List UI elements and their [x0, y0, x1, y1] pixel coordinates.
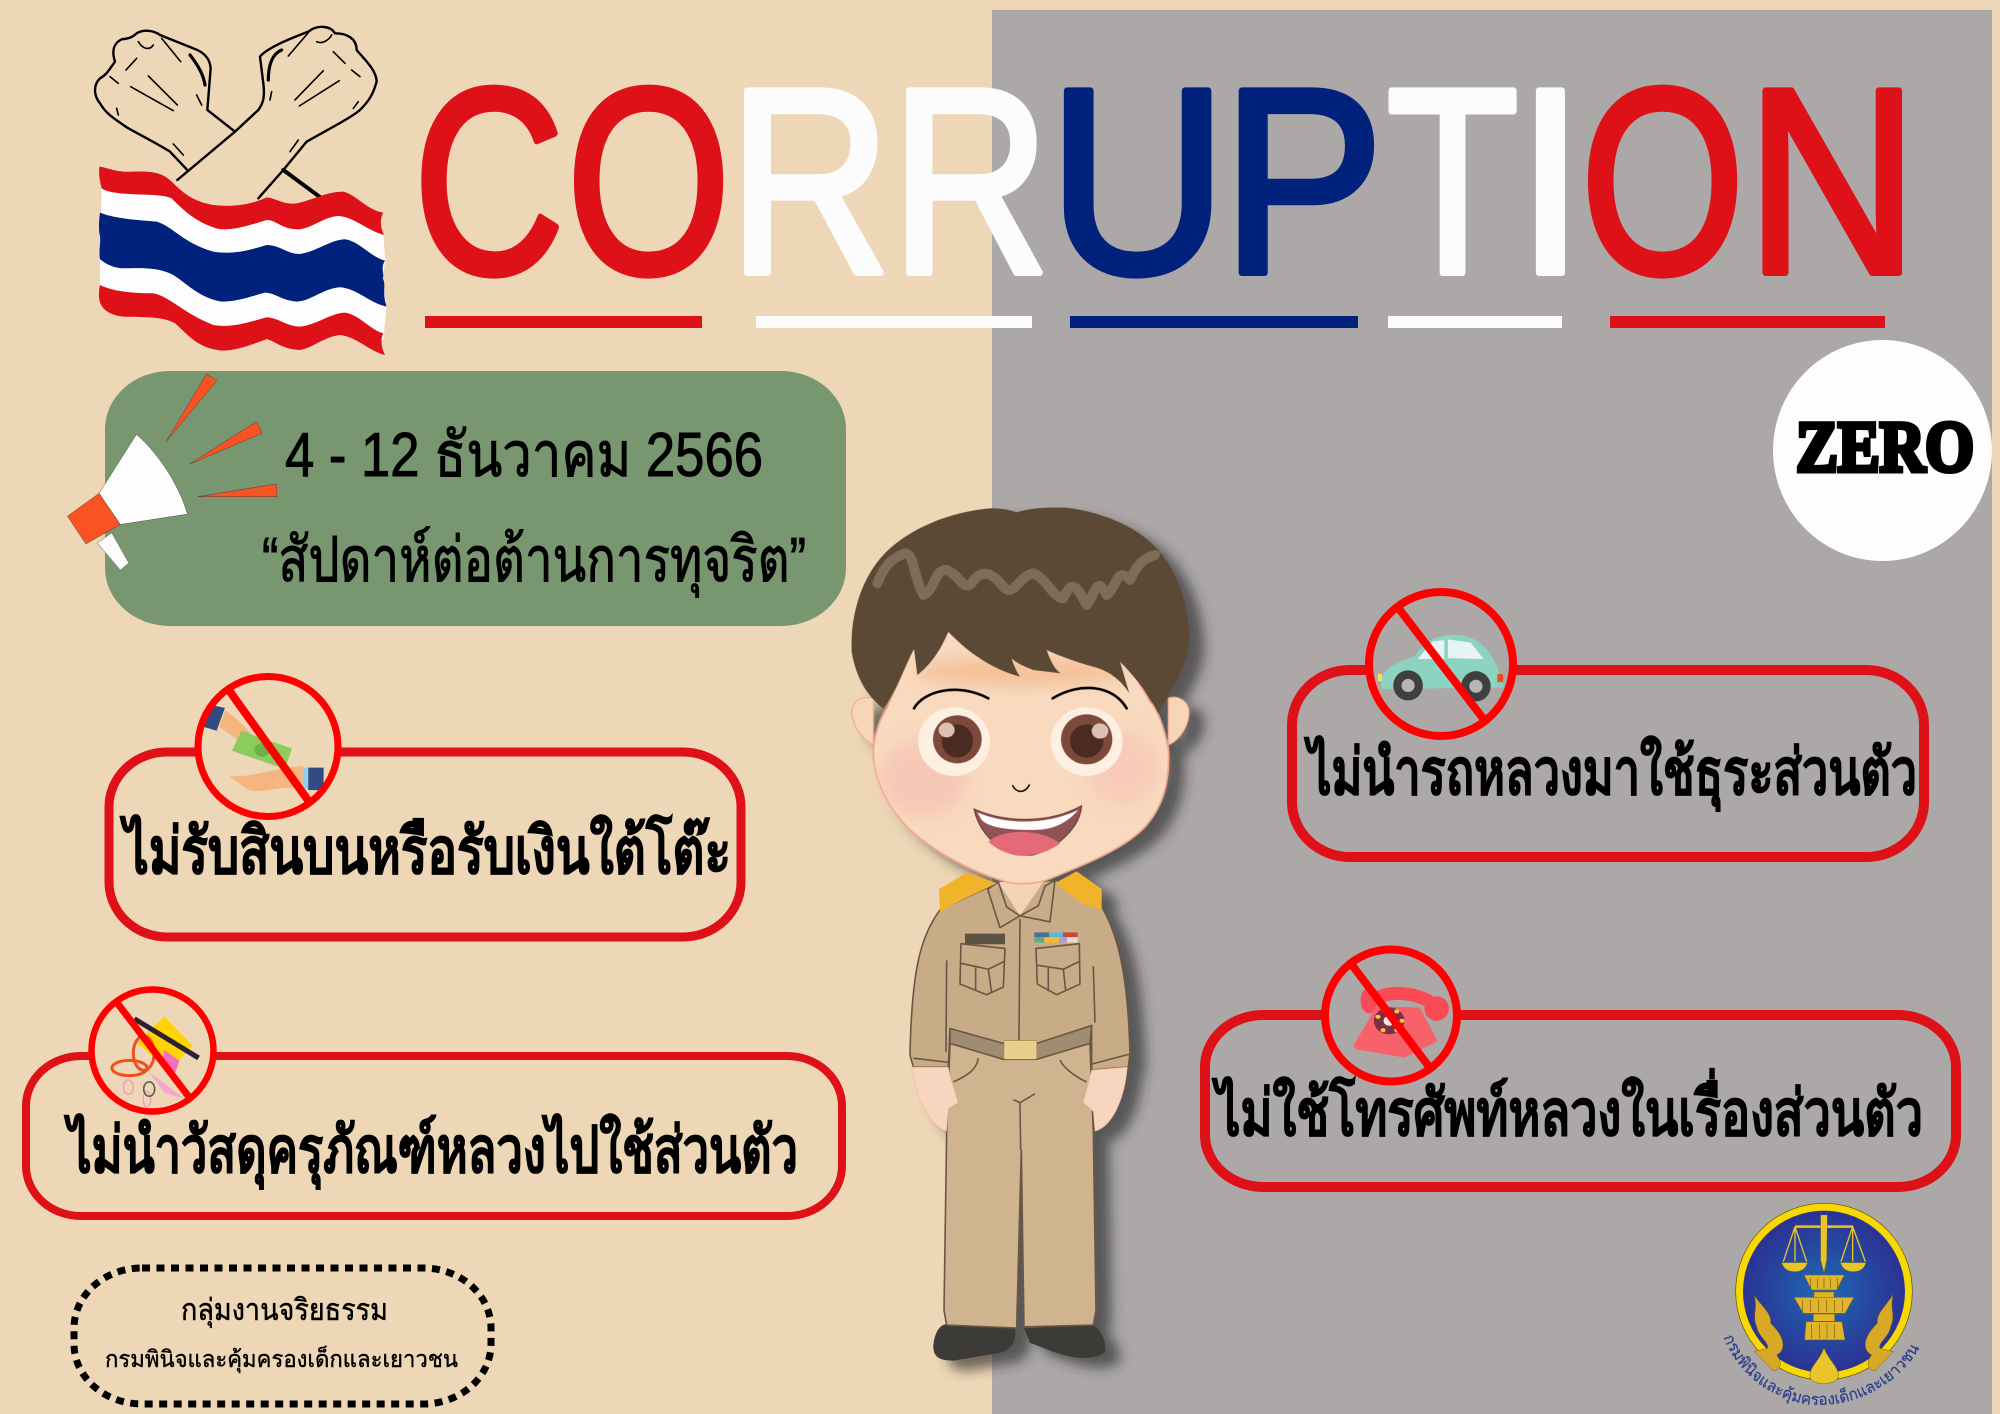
hands [913, 1067, 1127, 1131]
emblem caption: กรมพินิจและคุ้มครองเด็กและเยาวชน [1724, 1336, 1919, 1406]
mouth [974, 806, 1082, 855]
title: R [891, 34, 1050, 329]
title: U [1048, 34, 1227, 329]
heading: date: 4 - 12 ธันวาคม 2566 [285, 421, 763, 490]
text: no office supplies: ไม่นำวัสดุครุภัณฑ์หลวงไปใช้ส่วนตัว [64, 1113, 798, 1190]
title [414, 33, 1918, 329]
hair [851, 507, 1189, 713]
pedestal [1794, 1275, 1854, 1340]
icon: crossed arms [95, 27, 377, 198]
panel: no bribes [109, 676, 741, 937]
shoes [933, 1324, 1105, 1361]
text: department: กรมพินิจและคุ้มครองเด็กและเยาวชน [105, 1344, 458, 1373]
epaulettes [939, 871, 1102, 912]
shirt [910, 880, 1130, 1070]
title: R [728, 34, 891, 328]
trousers [944, 1043, 1096, 1328]
icon: waving Thai flag [99, 167, 387, 355]
title: I [1517, 33, 1584, 329]
eyes [918, 707, 990, 776]
icon: car [1378, 635, 1504, 701]
head [851, 507, 1189, 884]
heading: campaign name: “สัปดาห์ต่อต้านการทุจริต” [262, 526, 806, 597]
text: ethics group: กลุ่มงานจริยธรรม [181, 1294, 388, 1329]
title: O [1581, 34, 1744, 329]
title: N [1746, 34, 1918, 329]
nagas [1754, 1294, 1893, 1371]
title underlines [425, 316, 1885, 328]
title: O [567, 34, 730, 329]
icon: money changing hands [204, 704, 324, 791]
text: no bribes: ไม่รับสินบนหรือรับเงินใต้โต๊ะ [119, 813, 731, 887]
panel: footer credit [74, 1268, 491, 1404]
cheeks and forehead tint [880, 740, 967, 817]
belt [950, 1026, 1092, 1059]
title: C [414, 35, 564, 329]
icon: stationery [112, 1016, 199, 1107]
brows and nose [914, 688, 1127, 708]
badge: zero: ZERO [1796, 407, 1974, 487]
pockets [960, 944, 1080, 995]
title: P [1222, 34, 1384, 329]
face [873, 632, 1169, 884]
panel: gray right background [992, 10, 1992, 1414]
ears [852, 697, 1189, 745]
panel: date banner [105, 371, 846, 626]
hair highlight [877, 553, 1155, 605]
icon: telephone [1353, 987, 1449, 1058]
panel: no office supplies [26, 990, 842, 1216]
panel: no official phone [1205, 950, 1956, 1187]
lotus [1810, 1348, 1838, 1384]
panel: no official car [1292, 592, 1924, 857]
badge: zero [1773, 340, 1992, 561]
scales of justice [1782, 1215, 1866, 1273]
title: T [1386, 34, 1519, 329]
neck and collar [998, 882, 1043, 916]
character: civil servant boy [851, 507, 1189, 1361]
logo: department emblem [1724, 1203, 1919, 1406]
icon: megaphone [67, 374, 277, 570]
